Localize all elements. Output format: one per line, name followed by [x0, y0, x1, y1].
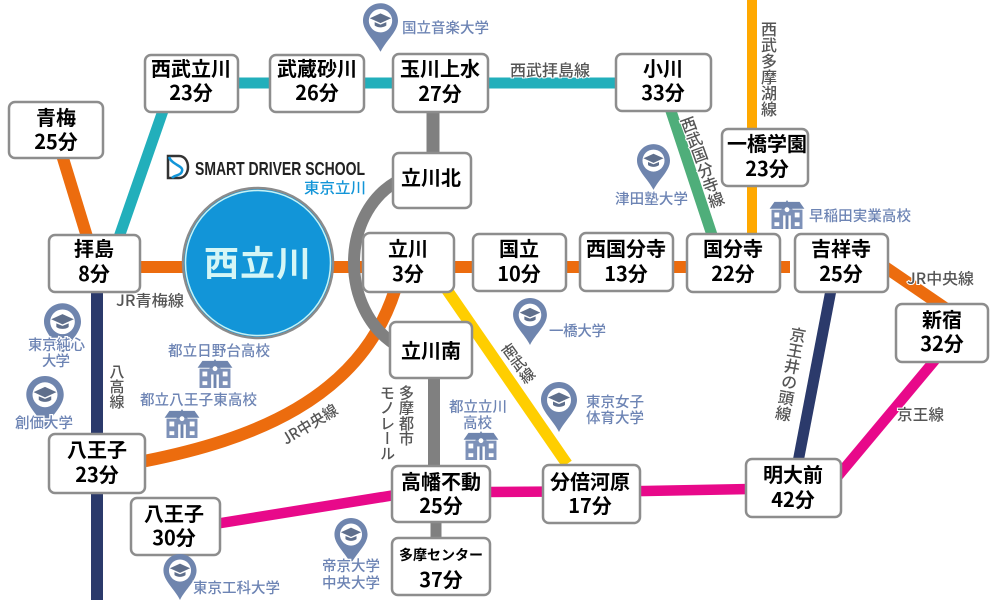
university: 東京女子体育大学: 東京女子 [586, 391, 644, 412]
station: 武蔵砂川: 武蔵砂川 [277, 53, 357, 82]
station: 西武立川: 23分 [169, 77, 213, 106]
university: 帝京大学 中央大学: 中央大学 [322, 572, 380, 593]
station: 高幡不動: 高幡不動 [401, 466, 481, 495]
station: 西武立川 [145, 53, 238, 112]
hub circle: 西立川: 西立川 [204, 236, 312, 287]
station: 八王子 30分: 八王子 [144, 498, 204, 527]
line: 西武拝島線 [118, 83, 620, 240]
station: 一橋学園: 一橋学園 [727, 128, 807, 157]
station: 一橋学園: 23分 [745, 153, 789, 182]
university: 東京女子体育大学: 体育大学 [586, 407, 644, 428]
line: 青梅線 [62, 155, 88, 240]
station: 武蔵砂川 [270, 53, 364, 112]
logo: Smart Driver School: 東京立川 [304, 177, 366, 198]
university: 東京純心大学: 大学 [42, 350, 70, 371]
station: 小川: 小川 [643, 53, 683, 82]
label: 多摩都市モノレール: モノレール [378, 385, 394, 461]
station: 小川: 33分 [641, 77, 685, 106]
label: 八高線: 八高線 [106, 364, 128, 409]
label: 京王線: 京王線 [897, 403, 944, 425]
label: JR中央線 west: JR中央線 [277, 398, 342, 449]
university: 一橋大学 [513, 298, 606, 345]
label: 西武拝島線: 西武拝島線 [510, 57, 590, 81]
university: 帝京大学 中央大学 [322, 518, 380, 593]
station: 八王子 30分 [131, 498, 220, 555]
label: 西武多摩湖線: 西武多摩湖線 [757, 21, 781, 117]
station: 八王子 23分: 23分 [75, 459, 119, 488]
station: 八王子 23分: 八王子 [67, 434, 127, 463]
station: 玉川上水: 27分 [418, 78, 462, 107]
station: 高幡不動 [392, 466, 490, 522]
station: 高幡不動: 25分 [419, 490, 463, 519]
label: 多摩都市モノレール: 多摩都市 [396, 384, 414, 446]
station: 明大前 [746, 459, 841, 517]
university: 東京女子体育大学 [541, 382, 644, 432]
school: 都立八王子東高校: 都立八王子東高校 [140, 389, 258, 410]
station: 多摩センター: 多摩センター [399, 545, 483, 565]
university: 津田塾大学: 津田塾大学 [615, 188, 688, 209]
school: 都立日野台高校 [168, 340, 270, 388]
station: 国立: 国立 [499, 233, 539, 262]
line: 南武線 [447, 290, 567, 464]
school: 都立八王子東高校 [140, 389, 258, 438]
school: 都立立川高校: 高校 [463, 412, 492, 433]
station: 立川南: 立川南 [401, 335, 461, 364]
station: 分倍河原: 分倍河原 [550, 466, 630, 495]
university: 津田塾大学 [615, 144, 688, 209]
line: 多摩都市モノレール [354, 110, 436, 540]
logo: Smart Driver School [168, 156, 366, 198]
station: 国分寺: 22分 [711, 258, 755, 287]
station: 西国分寺 [580, 233, 673, 291]
station: 立川南 [390, 322, 472, 378]
station: 立川北 [393, 153, 471, 208]
station: 青梅 [9, 102, 103, 158]
line: 西武国分寺線 [670, 108, 713, 238]
station: 立川: 3分 [392, 258, 424, 287]
station: 立川北: 立川北 [401, 162, 461, 191]
station: 新宿: 32分 [920, 328, 964, 357]
station: 明大前: 明大前 [763, 459, 823, 488]
station: 青梅: 青梅 [36, 102, 76, 131]
school: 早稲田実業高校 [770, 200, 912, 229]
label: JR青梅線: JR青梅線 [116, 289, 185, 311]
station: 小川 [616, 53, 711, 111]
university: 東京工科大学: 東京工科大学 [193, 577, 280, 598]
label: 南武線: 南武線 [497, 339, 540, 388]
station: 分倍河原 [543, 465, 640, 523]
label: 多摩都市モノレール [378, 384, 414, 461]
university: 国立音楽大学 [363, 3, 489, 52]
station: 西武立川: 西武立川 [151, 53, 231, 82]
station: 玉川上水: 玉川上水 [400, 53, 480, 82]
station: 吉祥寺 [795, 233, 888, 292]
school: 都立日野台高校: 都立日野台高校 [168, 340, 270, 361]
hub circle: 西立川 [183, 188, 333, 338]
station: 拝島: 拝島 [74, 233, 114, 262]
label: 西武国分寺線: 西武国分寺線 [675, 113, 730, 211]
station: 立川: 立川 [388, 233, 428, 262]
label: 京王井の頭線: 京王井の頭線 [770, 325, 811, 424]
station: 拝島 [49, 233, 140, 292]
station: 国立 [473, 233, 566, 291]
university: 創価大学 [15, 376, 73, 433]
university: 東京純心大学: 東京純心 [28, 334, 86, 355]
station: 明大前: 42分 [771, 484, 815, 513]
station: 多摩センター [392, 538, 490, 595]
school: 都立立川高校: 都立立川 [449, 396, 507, 417]
station: 八王子 23分 [49, 434, 145, 493]
station: 玉川上水 [393, 53, 488, 112]
line: 京王線 [215, 360, 935, 524]
station: 八王子 30分: 30分 [152, 522, 196, 551]
station: 多摩センター: 37分 [419, 564, 463, 593]
school: 早稲田実業高校: 早稲田実業高校 [809, 205, 912, 226]
station: 西国分寺: 西国分寺 [586, 233, 666, 262]
line: 京王井の頭線 [798, 290, 831, 462]
station: 武蔵砂川: 26分 [295, 77, 339, 106]
university: 国立音楽大学: 国立音楽大学 [402, 17, 489, 38]
station: 分倍河原: 17分 [568, 490, 612, 519]
school: 都立立川高校 [449, 396, 507, 460]
line: JR中央線 / 青梅線 [135, 267, 945, 308]
station: 国分寺: 国分寺 [703, 233, 763, 262]
university: 東京純心大学 [28, 303, 86, 371]
line: 八高線 [91, 285, 103, 600]
station: 青梅: 25分 [34, 126, 78, 155]
university: 帝京大学 中央大学: 帝京大学 [322, 555, 380, 576]
station: 立川 [363, 233, 454, 292]
station: 西国分寺: 13分 [604, 258, 648, 287]
station: 吉祥寺: 25分 [819, 258, 863, 287]
station: 拝島: 8分 [78, 258, 110, 287]
logo: Smart Driver School: SMART DRIVER SCHOOL [195, 159, 365, 179]
label: JR中央線 east: JR中央線 [907, 267, 975, 289]
station: 国立: 10分 [497, 258, 541, 287]
university: 創価大学: 創価大学 [15, 412, 73, 433]
line: 西武多摩湖線 [747, 0, 757, 240]
station: 吉祥寺: 吉祥寺 [811, 233, 871, 262]
station: 国分寺 [687, 233, 780, 292]
university: 一橋大学: 一橋大学 [549, 320, 606, 341]
station: 新宿 [896, 304, 988, 362]
line: JR中央線 八王子 curve [145, 290, 395, 461]
station: 一橋学園 [722, 128, 808, 186]
university: 東京工科大学 [163, 554, 280, 600]
station: 新宿: 新宿 [922, 304, 962, 333]
